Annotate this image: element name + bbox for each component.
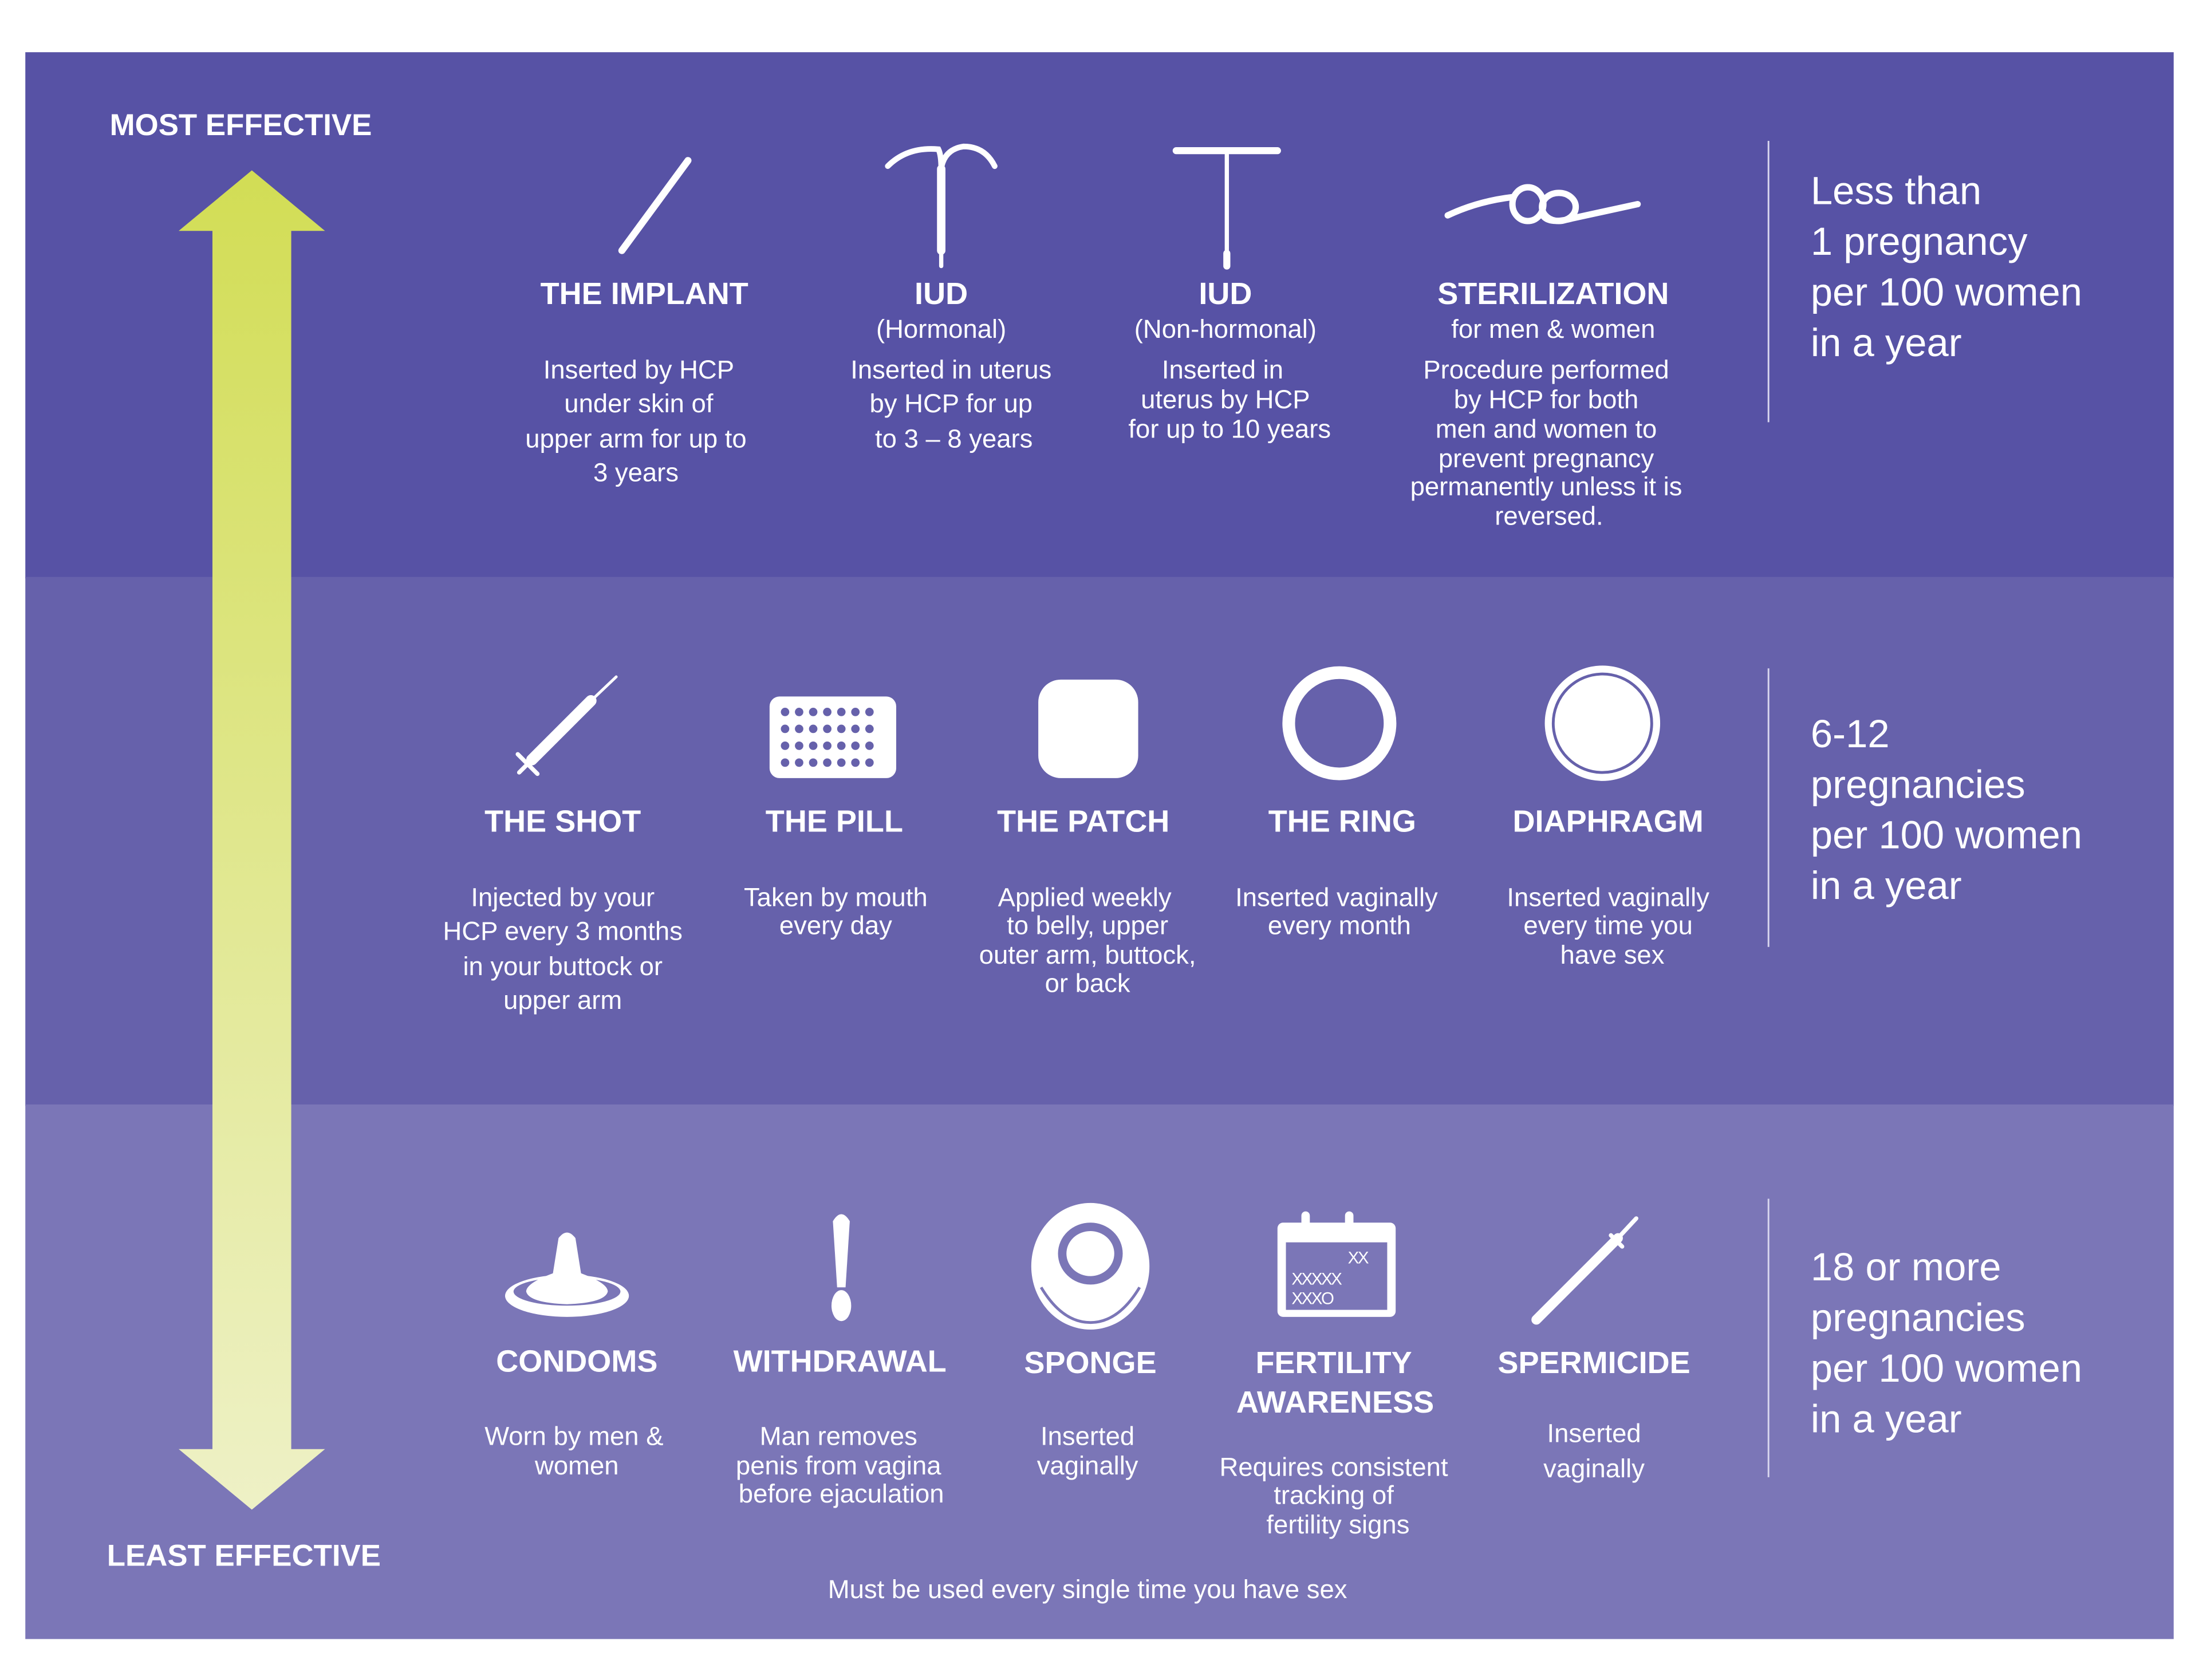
icon: diaphragm	[1545, 665, 1660, 781]
dividers	[1768, 141, 1769, 1477]
icon: calendar: XX	[1348, 1249, 1369, 1268]
right text: tier 2: 6-12	[1811, 712, 1890, 756]
method: patch: or back	[1045, 968, 1130, 997]
method: sponge	[1024, 1203, 1157, 1480]
method: patch: to belly, upper	[1007, 911, 1168, 940]
method: patch: THE PATCH	[997, 804, 1169, 838]
method: patch	[979, 680, 1196, 997]
method: hormonal IUD	[850, 147, 1051, 453]
method: condoms: CONDOMS	[496, 1344, 657, 1379]
method: spermicide	[1497, 1218, 1690, 1483]
method: withdrawal: WITHDRAWAL	[734, 1344, 947, 1379]
icon: calendar: XXXO	[1291, 1289, 1334, 1308]
method: shot	[443, 677, 683, 1015]
icon: copper IUD	[1176, 151, 1278, 266]
icon: implant rod	[622, 160, 688, 251]
method: fertility awareness: Requires consistent	[1220, 1452, 1448, 1481]
band: most effective	[25, 52, 2174, 578]
right text: tier 1: per 100 women	[1811, 270, 2082, 314]
method: shot: HCP every 3 months	[443, 916, 683, 945]
icon: hormonal IUD	[888, 147, 995, 266]
method: hormonal IUD: Inserted in uterus	[850, 355, 1051, 384]
method: shot: in your buttock or	[463, 952, 663, 981]
method: implant: THE IMPLANT	[541, 277, 748, 311]
right text: tier 2: per 100 women	[1811, 813, 2082, 857]
method: diaphragm: DIAPHRAGM	[1513, 804, 1704, 838]
method: ring: every month	[1268, 911, 1411, 940]
method: non-hormonal IUD: for up to 10 years	[1128, 414, 1331, 443]
method: implant: Inserted by HCP	[543, 355, 734, 384]
method: pill: every day	[779, 911, 892, 940]
method: ring: Inserted vaginally	[1235, 882, 1438, 912]
method: implant	[525, 160, 748, 487]
right text: tier 3: per 100 women	[1811, 1346, 2082, 1390]
icon: ring	[1288, 673, 1390, 774]
band: least effective	[25, 1105, 2174, 1639]
method: hormonal IUD: by HCP for up	[870, 389, 1032, 418]
method: sterilization: by HCP for both	[1454, 385, 1638, 414]
icon: tied tube knot	[1448, 187, 1638, 221]
right text: tier 2: pregnancies	[1811, 762, 2025, 806]
right text: tier 1	[1811, 169, 2082, 365]
method: implant: 3 years	[593, 458, 679, 487]
right text: tier 3: pregnancies	[1811, 1295, 2025, 1339]
right text: tier 3: 18 or more	[1811, 1245, 2001, 1289]
method: fertility awareness: tracking of	[1274, 1481, 1394, 1510]
method: shot: THE SHOT	[484, 804, 641, 838]
method: non-hormonal IUD	[1128, 151, 1331, 443]
icon: calendar	[1278, 1212, 1396, 1317]
method: hormonal IUD: to 3 – 8 years	[875, 424, 1032, 453]
method: withdrawal	[734, 1214, 947, 1508]
method: sponge: SPONGE	[1024, 1346, 1157, 1380]
method: non-hormonal IUD: (Non-hormonal)	[1134, 314, 1317, 344]
method: sterilization: reversed.	[1495, 502, 1603, 531]
method: shot: upper arm	[503, 985, 622, 1015]
right text: tier 2	[1811, 712, 2082, 908]
arrow: effectiveness scale	[179, 171, 325, 1509]
method: spermicide: vaginally	[1543, 1454, 1645, 1483]
method: patch: Applied weekly	[998, 882, 1172, 912]
icon: sponge	[1031, 1203, 1149, 1330]
icon: condom	[505, 1232, 629, 1317]
icon: applicator	[1536, 1218, 1636, 1320]
label: least effective: LEAST EFFECTIVE	[107, 1539, 381, 1573]
icon: pill pack	[770, 696, 896, 778]
label: most effective: MOST EFFECTIVE	[110, 108, 372, 142]
icon: calendar: XXXXX	[1291, 1269, 1342, 1288]
method: shot: Injected by your	[471, 882, 655, 912]
method: spermicide: SPERMICIDE	[1497, 1346, 1690, 1380]
right text: tier 3: in a year	[1811, 1397, 1962, 1441]
right text: tier 3	[1811, 1245, 2082, 1441]
method: ring: THE RING	[1268, 804, 1416, 838]
method: diaphragm: every time you	[1523, 911, 1693, 940]
method: fertility awareness: AWARENESS	[1236, 1385, 1434, 1419]
method: withdrawal: before ejaculation	[739, 1479, 944, 1508]
method: sponge: vaginally	[1037, 1451, 1138, 1480]
method: spermicide: Inserted	[1547, 1419, 1641, 1448]
right text: tier 2: in a year	[1811, 863, 1962, 908]
method: fertility awareness: fertility signs	[1266, 1510, 1409, 1539]
method: sponge: Inserted	[1041, 1421, 1134, 1450]
method: condoms: women	[534, 1451, 619, 1480]
icon: syringe	[518, 677, 616, 774]
method: fertility awareness: FERTILITY	[1255, 1346, 1412, 1380]
method: hormonal IUD: IUD	[915, 277, 968, 311]
method: pill	[744, 696, 928, 940]
method: pill: THE PILL	[766, 804, 903, 838]
method: withdrawal: penis from vagina	[736, 1451, 941, 1480]
method: diaphragm: Inserted vaginally	[1507, 882, 1709, 912]
footer note: Must be used every single time you have sex	[828, 1575, 1347, 1604]
method: condoms	[484, 1232, 664, 1480]
right text: tier 1: 1 pregnancy	[1811, 219, 2028, 263]
method: non-hormonal IUD: Inserted in	[1162, 355, 1283, 384]
method: sterilization: men and women to	[1436, 414, 1657, 443]
band: moderately effective	[25, 577, 2174, 1106]
method: patch: outer arm, buttock,	[979, 940, 1196, 969]
method: sterilization: Procedure performed	[1423, 355, 1669, 384]
method: withdrawal: Man removes	[760, 1421, 917, 1450]
right text: tier 1: in a year	[1811, 321, 1962, 365]
method: condoms: Worn by men &	[484, 1421, 664, 1450]
method: pill: Taken by mouth	[744, 882, 928, 912]
method: hormonal IUD: (Hormonal)	[876, 314, 1006, 344]
method: non-hormonal IUD: uterus by HCP	[1141, 385, 1310, 414]
method: sterilization: for men & women	[1451, 314, 1655, 344]
method: fertility awareness	[1220, 1212, 1448, 1539]
method: diaphragm	[1507, 665, 1709, 969]
method: sterilization	[1410, 187, 1682, 531]
method: implant: under skin of	[564, 389, 714, 418]
method: sterilization: prevent pregnancy	[1439, 444, 1654, 473]
icon: exclamation mark	[831, 1214, 851, 1321]
icon: patch	[1038, 680, 1138, 778]
method: sterilization: permanently unless it is	[1410, 472, 1682, 501]
method: implant: upper arm for up to	[525, 424, 747, 453]
method: non-hormonal IUD: IUD	[1199, 277, 1252, 311]
method: sterilization: STERILIZATION	[1437, 277, 1669, 311]
right text: tier 1: Less than	[1811, 169, 1981, 213]
method: ring	[1235, 673, 1438, 940]
method: diaphragm: have sex	[1560, 940, 1665, 969]
